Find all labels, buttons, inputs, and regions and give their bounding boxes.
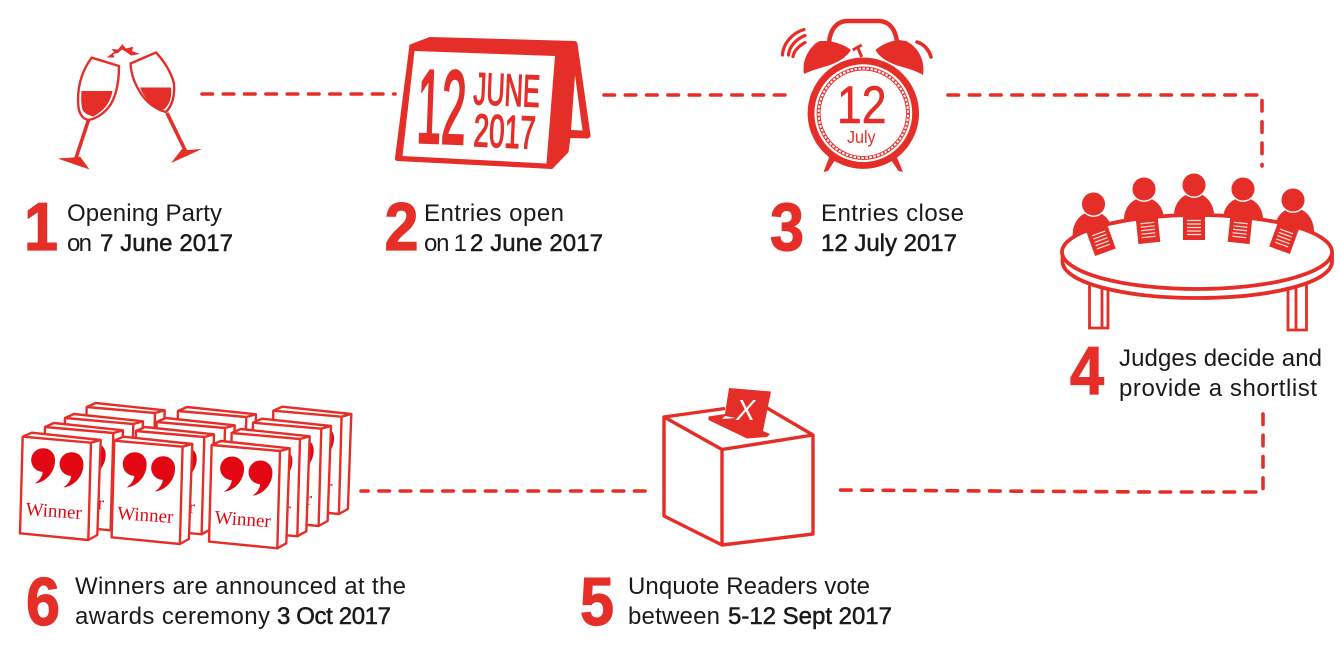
step 6 text: 3 Oct 2017 xyxy=(277,603,391,630)
step 4 number: 4 xyxy=(1070,332,1104,409)
step 2 number: 2 xyxy=(384,188,419,265)
step 5 number: 5 xyxy=(580,563,614,640)
icon: ballot box xyxy=(664,388,813,545)
step 2 text: 2 June 2017 xyxy=(470,230,603,257)
icon: desk calendar: JUNE xyxy=(473,63,541,117)
arrow: dashed connector 4 to 5 xyxy=(836,414,1263,492)
step 3 text: Entries close xyxy=(821,200,964,227)
step 5 text xyxy=(628,573,892,630)
icon: stacks of winner books: Winner xyxy=(214,507,272,532)
arrow: dashed connector 2 to 3 xyxy=(604,93,785,97)
step 1 text: Opening Party xyxy=(67,200,222,227)
step 2 text: Entries open xyxy=(424,200,564,227)
step 5 text: 5-12 Sept 2017 xyxy=(728,603,892,630)
step 2 text xyxy=(424,200,603,257)
step 6 text: Winners are announced at the xyxy=(75,573,406,600)
icon: stacks of winner books xyxy=(20,403,351,548)
icon: stacks of winner books: Winner xyxy=(234,495,292,520)
step 3 text xyxy=(821,200,964,257)
step 2 text: on 1 xyxy=(424,230,467,257)
icon: clinking wine glasses xyxy=(58,44,202,169)
icon: alarm clock: 12 xyxy=(837,76,887,135)
icon: stacks of winner books: Winner xyxy=(47,489,105,514)
step 5 text: between xyxy=(628,603,720,630)
step 3 text: 12 July 2017 xyxy=(821,230,957,257)
icon: stacks of winner books: Winner xyxy=(116,503,175,528)
icon: judges at round table xyxy=(1062,173,1332,330)
step 5 text: Unquote Readers vote xyxy=(628,573,870,600)
step 1 text xyxy=(67,200,233,257)
arrow: dashed connector 3 to 4 xyxy=(948,95,1262,166)
step 3 number: 3 xyxy=(770,188,804,265)
step 1 number: 1 xyxy=(24,188,58,265)
step 6 text xyxy=(75,573,406,630)
icon: stacks of winner books: Winner xyxy=(138,493,196,518)
step 6 text: awards ceremony xyxy=(75,603,270,630)
step 4 text: Judges decide and xyxy=(1119,345,1322,372)
icon: ballot box: X xyxy=(735,395,757,427)
arrow: dashed connector 5 to 6 xyxy=(361,489,645,493)
step 6 number: 6 xyxy=(26,563,60,640)
step 1 text: 7 June 2017 xyxy=(100,230,233,257)
icon: desk calendar: 2017 xyxy=(473,106,537,160)
step 4 text xyxy=(1119,345,1322,402)
icon: desk calendar xyxy=(395,38,590,168)
icon: stacks of winner books: Winner xyxy=(275,473,334,498)
arrow: dashed connector 1 to 2 xyxy=(202,92,395,96)
step 4 text: provide a shortlist xyxy=(1119,375,1317,402)
step 1 text: on xyxy=(67,230,92,257)
icon: stacks of winner books: Winner xyxy=(25,499,83,524)
icon: alarm clock: July xyxy=(847,127,876,147)
icon: stacks of winner books: Winner xyxy=(255,485,313,510)
icon: desk calendar: 12 xyxy=(415,48,468,166)
icon: alarm clock xyxy=(782,21,931,172)
